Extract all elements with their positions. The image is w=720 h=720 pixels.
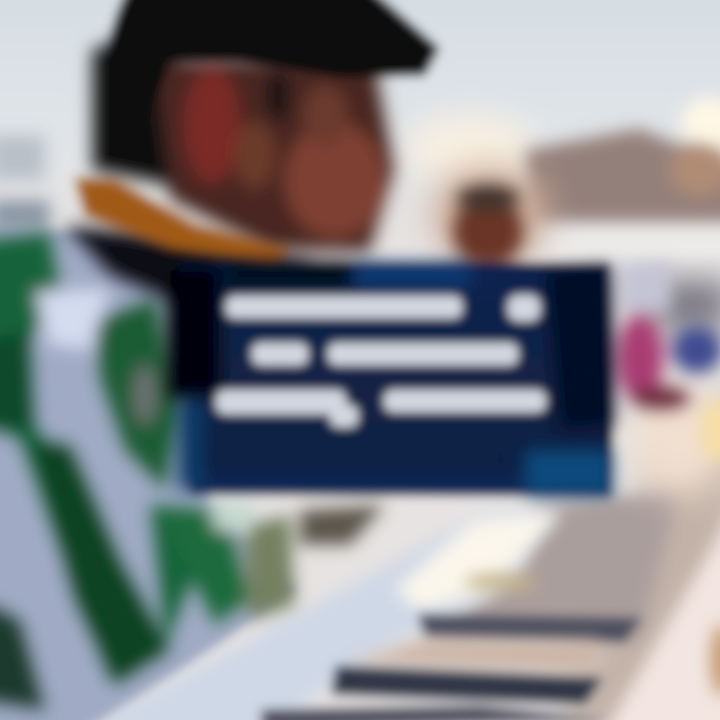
blue sign panel	[170, 262, 614, 497]
sign text: three white blurred lines, illegible in the reference	[216, 295, 546, 427]
boy: black cap	[105, 0, 440, 120]
boy: orange collar	[75, 178, 290, 262]
boy: dark neck and hair	[65, 20, 320, 400]
far left structure	[0, 135, 50, 230]
small person behind sign	[432, 165, 548, 268]
boy: face	[150, 60, 395, 252]
pink and blue figures behind sign	[616, 314, 720, 410]
bright deck lower right	[65, 385, 720, 720]
boy: green and white striped shirt	[0, 225, 385, 720]
distant building	[525, 128, 720, 330]
